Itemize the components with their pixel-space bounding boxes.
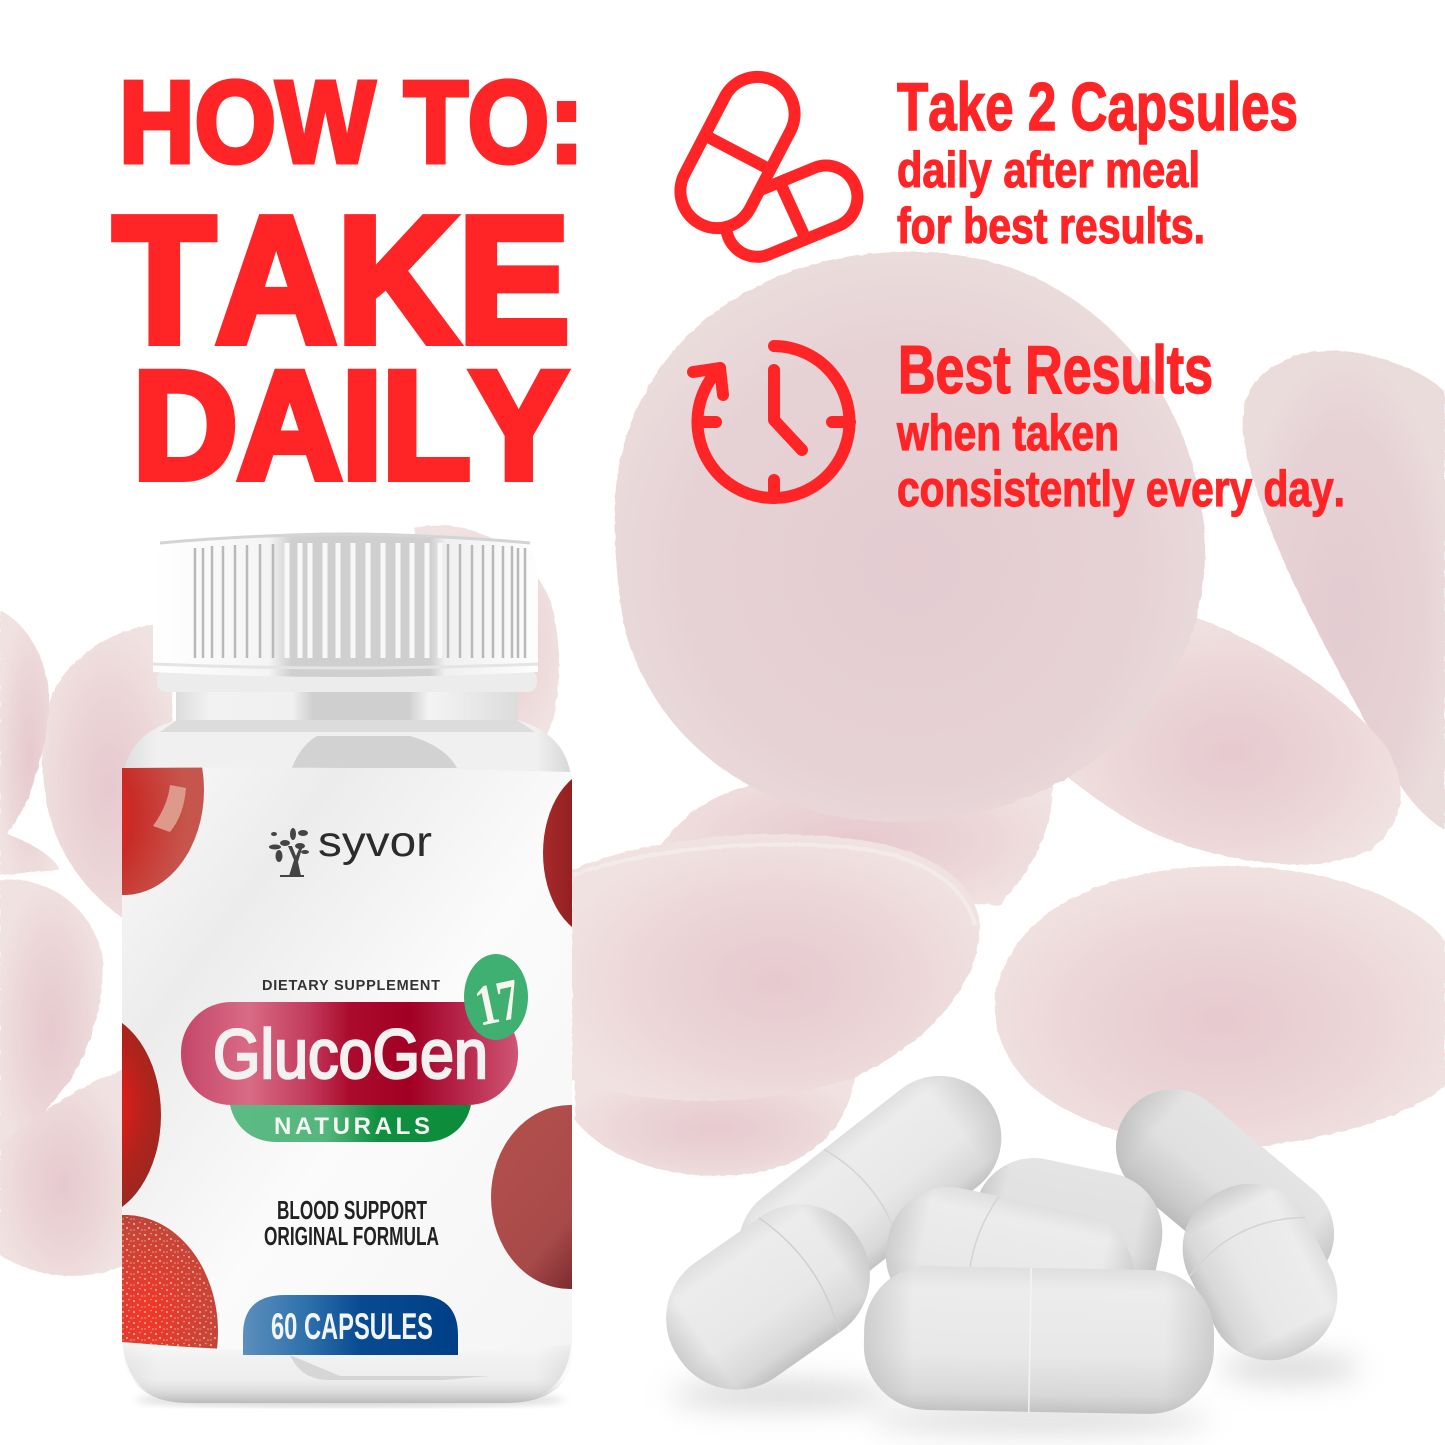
cell: big disc: [615, 252, 1205, 822]
badge: 17: 17: [469, 966, 526, 1039]
text block: best results: when taken: [896, 405, 1119, 461]
heading line: daily: DAILY: [133, 340, 567, 511]
label spot: top left: [122, 768, 204, 895]
label spot: top right: [543, 779, 572, 927]
icon: capsules: [668, 64, 857, 257]
brand logo: syvor: [269, 818, 432, 877]
naturals banner: [230, 1105, 471, 1142]
text block: best results: Best Results: [898, 332, 1213, 408]
cell: lower under: [575, 1070, 855, 1176]
heading line: take: TAKE: [113, 180, 570, 381]
text block: take 2 capsules: Take 2 Capsules: [897, 69, 1298, 145]
badge: 60 capsules: [243, 1295, 458, 1355]
cell: far left middle: [0, 880, 103, 1150]
bottle body: [122, 720, 572, 1403]
label text: blood support original formula: BLOOD SUPPORT: [277, 1195, 427, 1225]
naturals banner: NATURALS: [274, 1113, 430, 1140]
bottle shadow: [135, 1393, 565, 1407]
cell: far left bottom: [0, 1070, 125, 1276]
icon: tree: [269, 828, 309, 877]
capsules pile: [639, 1051, 1360, 1432]
badge: 60 capsules: 60 CAPSULES: [271, 1306, 433, 1347]
bottom shade: [122, 1340, 572, 1403]
capsule: front left: [639, 1178, 897, 1416]
capsule: back middle: [956, 1147, 1174, 1333]
cell: top right edge: [1243, 351, 1445, 830]
capsule: right front: [1161, 1162, 1359, 1382]
text block: best results: consistently every day.: [897, 461, 1345, 517]
label spot: left middle: [122, 1023, 161, 1207]
cell: left upper behind bottle: [42, 624, 175, 920]
capsule: back left: [714, 1051, 1026, 1333]
text block: take 2 capsules: [897, 69, 1298, 254]
neck ring: [157, 670, 537, 692]
brand name: syvor: [318, 818, 432, 866]
cell: right middle: [1065, 615, 1401, 864]
label: dietary supplement: DIETARY SUPPLEMENT: [262, 978, 440, 994]
icon: clock with arrow: [693, 346, 850, 498]
cap ridges: [195, 544, 525, 658]
heading line: how to: HOW TO:: [119, 57, 584, 187]
bottle neck: [176, 672, 518, 727]
label text: blood support original formula: [264, 1195, 439, 1251]
bottle label: [122, 768, 572, 1349]
label spot: right: [491, 1105, 572, 1289]
glucogen banner: [181, 1002, 518, 1105]
shoulder shadow: [292, 736, 457, 768]
label text: blood support original formula: ORIGINAL FORMULA: [264, 1221, 439, 1251]
shoulder band: [160, 720, 535, 732]
capsule: front: [863, 1265, 1215, 1415]
capsule shadows: [670, 1354, 1360, 1432]
text block: take 2 capsules: for best results.: [897, 198, 1205, 254]
bottom reflection: [290, 1355, 490, 1380]
badge: 17: [464, 954, 528, 1040]
capsule: middle: [874, 1175, 1146, 1355]
product bottle: [122, 532, 572, 1408]
glucogen banner: GlucoGen: [213, 1015, 488, 1093]
cell: behind big disc: [660, 760, 1053, 905]
heading: how to take daily: [113, 57, 584, 511]
bottle cap: [153, 532, 538, 677]
text block: take 2 capsules: daily after meal: [897, 142, 1200, 198]
cell: centre red disc: [572, 834, 980, 1101]
blood cells backdrop: [0, 252, 1445, 1276]
cell: lower right: [995, 866, 1445, 1147]
capsule: right back: [1093, 1066, 1357, 1314]
label spot: bottom left: [122, 1215, 218, 1349]
cell: far left upper: [0, 610, 60, 875]
text block: best results: [896, 332, 1345, 517]
cell: behind cap: [400, 525, 559, 740]
